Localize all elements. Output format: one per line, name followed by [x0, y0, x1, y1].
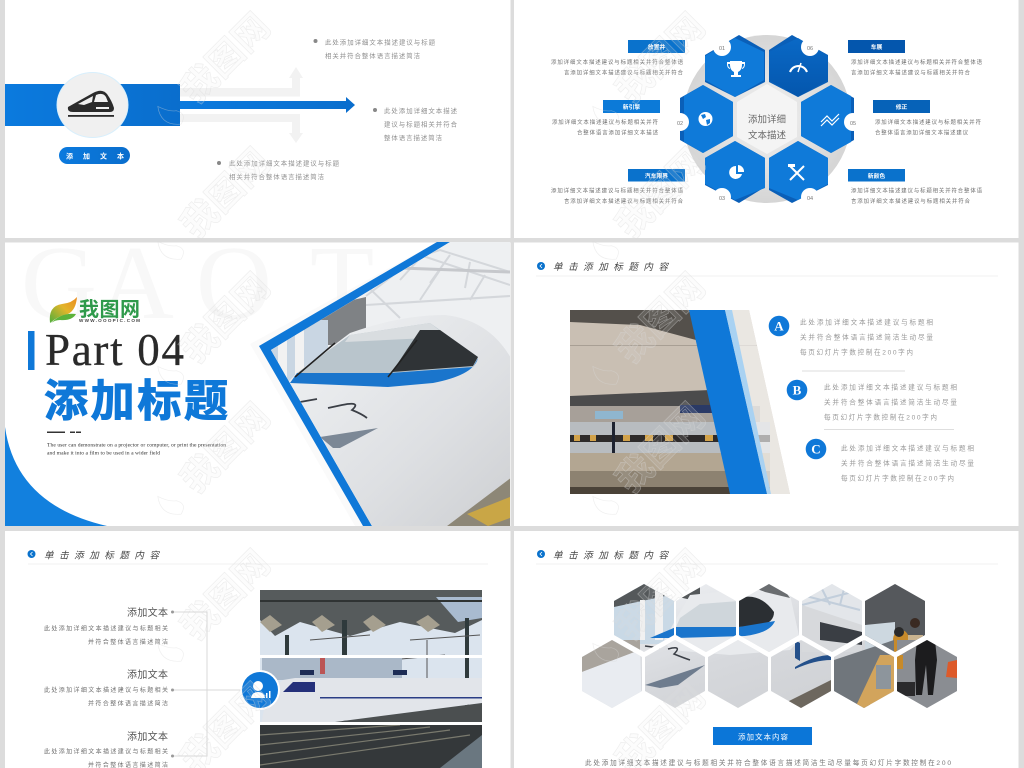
- item A: 此处添加详细文本描述建议与标题相: [800, 318, 933, 326]
- item A: 每页幻灯片字数控制在200字内: [800, 348, 913, 356]
- header: [536, 550, 998, 564]
- header: 单击添加标题内容: [553, 261, 669, 273]
- english description: and make it into a film to be used in a wider field: [47, 450, 160, 456]
- number badges: [671, 38, 862, 206]
- watermark: 我图网: [173, 395, 278, 501]
- blue stripe: [689, 310, 767, 494]
- blue photo frame: [259, 242, 450, 526]
- logo: [50, 297, 140, 323]
- english description: The user can demonstrate on a projector or computer, or print the presentation: [47, 442, 226, 448]
- button: [713, 727, 812, 745]
- header: 单击添加标题内容: [44, 550, 160, 562]
- connector lines: [172, 612, 245, 756]
- icon: user stats badge: [240, 670, 280, 710]
- item B: 此处添加详细文本描述建议与标题相: [824, 382, 957, 392]
- corner curve: [5, 427, 107, 526]
- item C: C: [811, 442, 821, 456]
- descriptions: 言添加详细文本描述建议与标题相关并符合: [851, 68, 971, 76]
- light stripe: [725, 310, 771, 494]
- blue arrow: [180, 97, 355, 113]
- label pill: [59, 147, 130, 164]
- text block bottom: 相关并符合整体语言描述简洁: [229, 172, 325, 181]
- item A: 关并符合整体语言描述简洁生动尽量: [800, 332, 933, 342]
- text block top: 相关并符合整体语言描述简洁: [325, 51, 421, 60]
- descriptions: 添加详细文本描述建议与标题相关并符合整体语: [551, 186, 684, 194]
- item A: A: [774, 318, 784, 334]
- panel: hexagon photo slide: [514, 531, 1018, 768]
- hexagon 04: [769, 141, 828, 203]
- background letters: GAO T: [21, 224, 374, 341]
- watermark: 我图网: [173, 140, 278, 246]
- item 1: 此处添加详细文本描述建议与标题相关: [44, 624, 168, 632]
- panel: A B C slide: [514, 242, 1018, 526]
- number badges: 01: [719, 46, 725, 52]
- text block middle: 此处添加详细文本描述: [384, 106, 458, 115]
- label tags: 放置井: [648, 43, 665, 51]
- label tags: 车展: [871, 43, 882, 51]
- item 2: 添加文本: [127, 668, 168, 681]
- number badges: 03: [719, 196, 725, 202]
- watermark: 我图网: [608, 5, 713, 111]
- text block middle: 整体语言描述简洁: [384, 133, 443, 142]
- item B: [787, 380, 957, 422]
- item 3: [44, 730, 174, 768]
- hexagon 01: [705, 35, 765, 97]
- descriptions: 合整体语言添加详细文本描述建议: [875, 128, 969, 136]
- number badges: 06: [807, 46, 813, 52]
- center hexagon: 添加详细: [748, 114, 786, 126]
- descriptions: 言添加详细文本描述建议与标题相关并符合: [564, 68, 684, 76]
- watermark: 我图网: [173, 542, 278, 648]
- label pill: 添加文本: [66, 152, 124, 160]
- logo: 我图网: [79, 298, 140, 321]
- gray arrow down: [180, 114, 303, 143]
- backing disc: [683, 35, 851, 203]
- item A: [769, 316, 933, 356]
- item C: [806, 439, 974, 482]
- hexagon 05: [801, 85, 854, 153]
- text block top: [314, 38, 436, 60]
- number badges: 02: [677, 121, 683, 127]
- white photo frame: [250, 242, 437, 526]
- text block bottom: 此处添加详细文本描述建议与标题: [229, 158, 340, 168]
- label tags: [603, 40, 930, 182]
- text block middle: 建议与标题相关并符合: [384, 120, 458, 128]
- icon: train in circle: [56, 72, 128, 138]
- item 3: 此处添加详细文本描述建议与标题相关: [44, 748, 168, 756]
- heading: part number: Part 04: [45, 325, 184, 375]
- header: 单击添加标题内容: [553, 550, 669, 562]
- item 3: 添加文本: [127, 730, 168, 743]
- item C: 此处添加详细文本描述建议与标题相: [841, 444, 974, 452]
- number badges: 05: [850, 121, 856, 127]
- panel: section cover slide: [5, 224, 512, 526]
- button: 添加文本内容: [738, 732, 788, 742]
- item C: 关并符合整体语言描述简洁生动尽量: [841, 458, 974, 468]
- center hexagon: 文本描述: [748, 130, 786, 142]
- photo: train at platform in three strips: [260, 590, 482, 768]
- descriptions: 添加详细文本描述建议与标题相关并符: [552, 118, 659, 126]
- watermark: 我图网: [608, 395, 713, 501]
- logo: WWW.OOOPIC.COM: [79, 318, 140, 323]
- item C: 每页幻灯片字数控制在200字内: [841, 474, 954, 482]
- panel: hexagon diagram slide: [514, 0, 1018, 238]
- description: 此处添加详细文本描述建议与标题相关并符合整体语言描述简洁生动尽量每页幻灯片字数控制在200: [585, 758, 951, 767]
- blue band: [5, 84, 180, 126]
- descriptions: 言添加详细文本描述建议与标题相关并符合: [851, 197, 971, 205]
- heading: title: 添加标题: [44, 377, 228, 426]
- accent bar: [28, 331, 34, 370]
- text block bottom: [217, 158, 340, 181]
- watermark: 我图网: [608, 265, 713, 371]
- item B: 关并符合整体语言描述简洁生动尽量: [824, 398, 957, 406]
- label tags: 新颜色: [868, 172, 885, 180]
- descriptions: 添加详细文本描述建议与标题相关并符合整体语: [851, 186, 983, 194]
- panel: arrows slide: [5, 0, 510, 238]
- watermark: 我图网: [173, 5, 278, 111]
- dash divider: [47, 432, 81, 433]
- descriptions: 添加详细文本描述建议与标题相关并符: [875, 118, 982, 126]
- label tags: 修正: [896, 103, 907, 111]
- hexagon 06: [769, 35, 828, 97]
- label tags: 新引擎: [623, 103, 640, 111]
- descriptions: 添加详细文本描述建议与标题相关并符合整体语: [551, 58, 684, 66]
- label tags: 汽车限界: [645, 172, 668, 180]
- gray arrow up: [180, 67, 303, 96]
- photo: station with train: [570, 310, 800, 494]
- watermark: 我图网: [608, 542, 713, 648]
- center hexagon: [737, 84, 797, 154]
- watermark: [149, 5, 713, 768]
- header: [536, 261, 998, 276]
- item 2: [44, 668, 174, 708]
- hexagon photo mosaic: [582, 584, 957, 708]
- item B: 每页幻灯片字数控制在200字内: [824, 412, 937, 422]
- number badges: 04: [807, 196, 813, 202]
- item 2: 并符合整体语言描述简洁: [88, 700, 168, 708]
- text block middle: [373, 106, 458, 142]
- descriptions: [551, 58, 983, 205]
- watermark: 我图网: [608, 140, 713, 246]
- item 2: 此处添加详细文本描述建议与标题相关: [44, 686, 168, 694]
- item 1: [44, 606, 174, 646]
- hexagon 03: [705, 141, 765, 203]
- english description: [47, 442, 226, 456]
- text block top: 此处添加详细文本描述建议与标题: [325, 38, 436, 46]
- panel: three text items slide: [5, 531, 510, 768]
- descriptions: 合整体语言添加详细文本描述: [577, 128, 659, 136]
- header: [28, 550, 488, 564]
- item 1: 并符合整体语言描述简洁: [88, 638, 168, 646]
- hexagon 02: [680, 85, 733, 153]
- item 1: 添加文本: [127, 606, 168, 619]
- watermark: 我图网: [173, 265, 278, 371]
- descriptions: 言添加详细文本描述建议与标题相关并符合: [564, 197, 684, 205]
- descriptions: 添加详细文本描述建议与标题相关并符合整体语: [851, 58, 983, 66]
- photo: train nose: [260, 242, 512, 526]
- item B: B: [793, 382, 802, 398]
